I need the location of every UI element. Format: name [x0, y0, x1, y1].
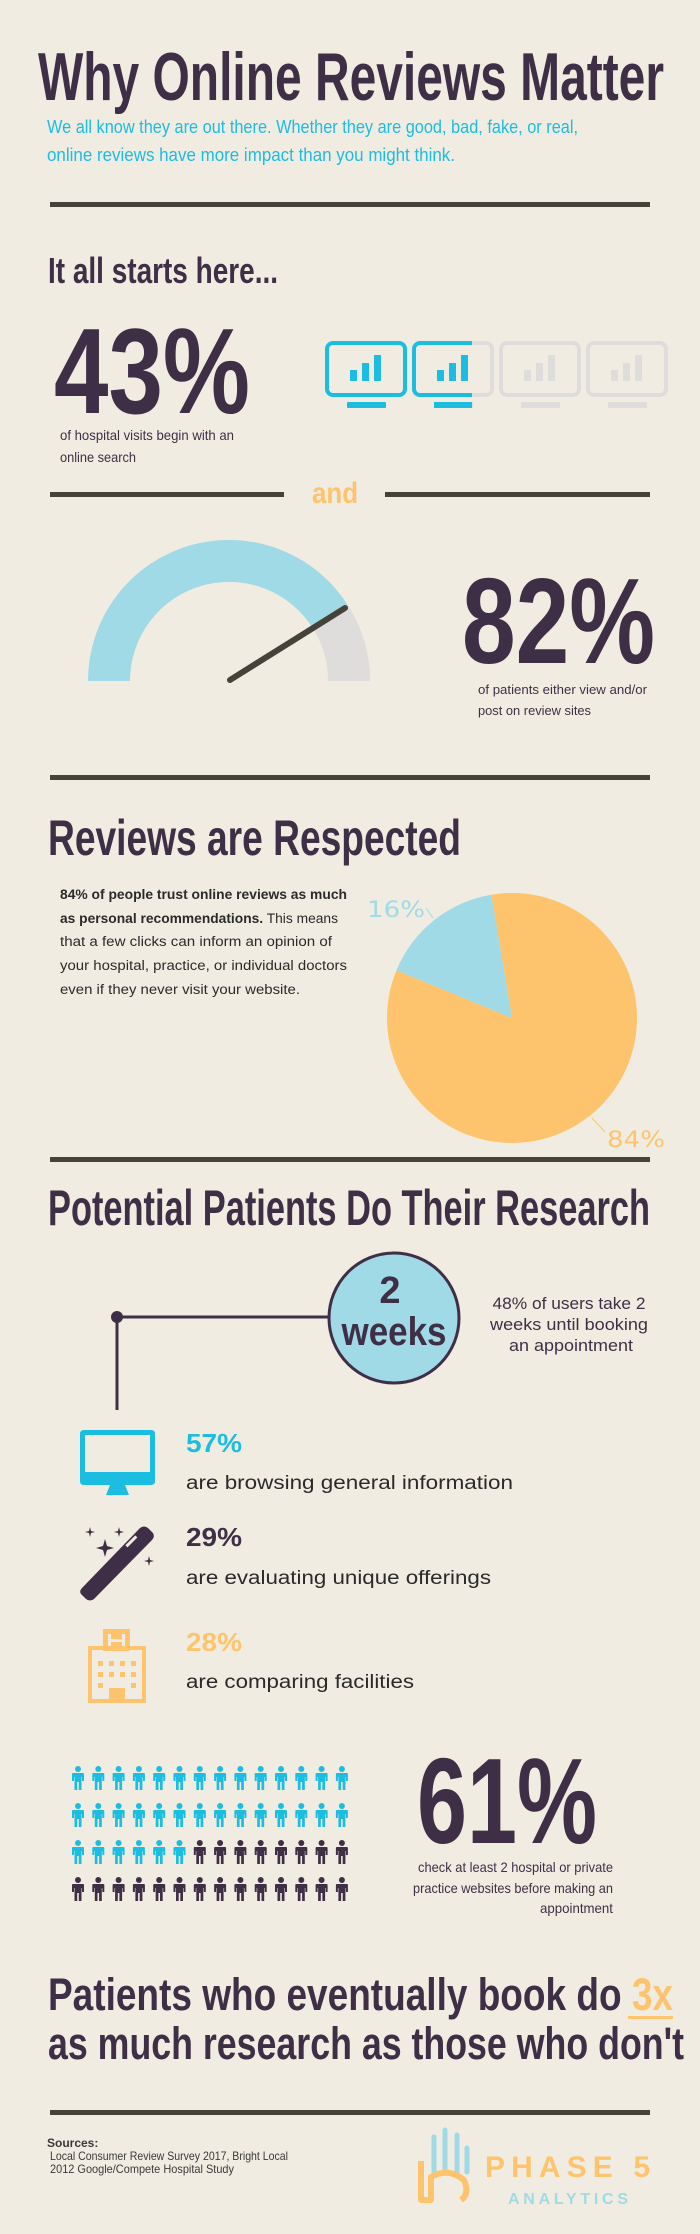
sources: 2012 Google/Compete Hospital Study — [50, 2162, 234, 2176]
paragraph: as personal recommendations. This means — [60, 911, 338, 926]
icon: hospital — [88, 1629, 146, 1703]
2 weeks text: 48% of users take 2 — [492, 1294, 646, 1313]
stat 43% — [54, 303, 250, 465]
2 weeks circle: 2 — [379, 1270, 401, 1312]
subtitle: We all know they are out there. Whether they are good, bad, fake, or real, — [47, 117, 578, 137]
people pictogram — [72, 1766, 348, 1901]
closing statement — [48, 1969, 684, 2069]
heading: reviews are respected: Reviews are Respected — [48, 810, 461, 866]
stat 57%: 57% — [186, 1428, 242, 1458]
2 weeks text: weeks until booking — [489, 1315, 648, 1334]
stat 43%: 43% — [54, 303, 250, 439]
pie chart: 84% — [607, 1128, 665, 1153]
stat 57%: are browsing general information — [186, 1473, 513, 1494]
stat 61%: 61% — [417, 1733, 597, 1869]
subtitle — [47, 117, 578, 165]
paragraph: your hospital, practice, or individual doctors — [60, 958, 347, 973]
stat 82%: 82% — [462, 553, 655, 689]
stat 82%: post on review sites — [478, 703, 591, 718]
stat 29%: are evaluating unique offerings — [186, 1568, 491, 1589]
and: and — [312, 477, 358, 510]
stat 43%: of hospital visits begin with an — [60, 427, 234, 443]
subtitle: online reviews have more impact than you might think. — [47, 145, 455, 165]
paragraph: that a few clicks can inform an opinion of — [60, 934, 332, 949]
icon: monitors — [327, 343, 666, 408]
2 weeks text — [489, 1294, 648, 1355]
2 weeks circle — [329, 1253, 459, 1383]
icon: monitor — [80, 1430, 155, 1495]
icon: magic wand — [80, 1526, 154, 1600]
timeline connector — [111, 1311, 330, 1410]
sources: Sources: — [47, 2136, 98, 2150]
logo: phase 5 analytics: PHASE 5 — [485, 2151, 650, 2184]
stat 82%: of patients either view and/or — [478, 682, 648, 697]
stat 43%: online search — [60, 449, 136, 465]
logo: phase 5 analytics: ANALYTICS — [508, 2191, 628, 2208]
stat 61%: appointment — [540, 1900, 613, 1916]
stat 28%: are comparing facilities — [186, 1672, 414, 1693]
paragraph: 84% of people trust online reviews as much — [60, 887, 347, 902]
stat 61%: practice websites before making an — [413, 1880, 613, 1896]
stat 28% — [186, 1627, 414, 1693]
stat 61%: check at least 2 hospital or private — [418, 1859, 613, 1875]
paragraph — [60, 887, 347, 997]
gauge chart — [109, 561, 349, 681]
stat 29% — [186, 1522, 491, 1589]
stat 29%: 29% — [186, 1522, 242, 1552]
sources — [47, 2136, 288, 2176]
logo: phase 5 analytics — [421, 2130, 650, 2208]
pie chart: 16% — [367, 898, 425, 923]
stat 61% — [413, 1733, 613, 1916]
paragraph: even if they never visit your website. — [60, 982, 300, 997]
sources: Local Consumer Review Survey 2017, Bright Local — [50, 2149, 288, 2163]
heading: it all starts here: It all starts here... — [48, 250, 278, 291]
pie chart — [367, 893, 665, 1153]
2 weeks circle: weeks — [341, 1310, 446, 1354]
stat 82% — [462, 553, 655, 718]
stat 28%: 28% — [186, 1627, 242, 1657]
stat 57% — [186, 1428, 513, 1494]
2 weeks text: an appointment — [509, 1336, 633, 1355]
